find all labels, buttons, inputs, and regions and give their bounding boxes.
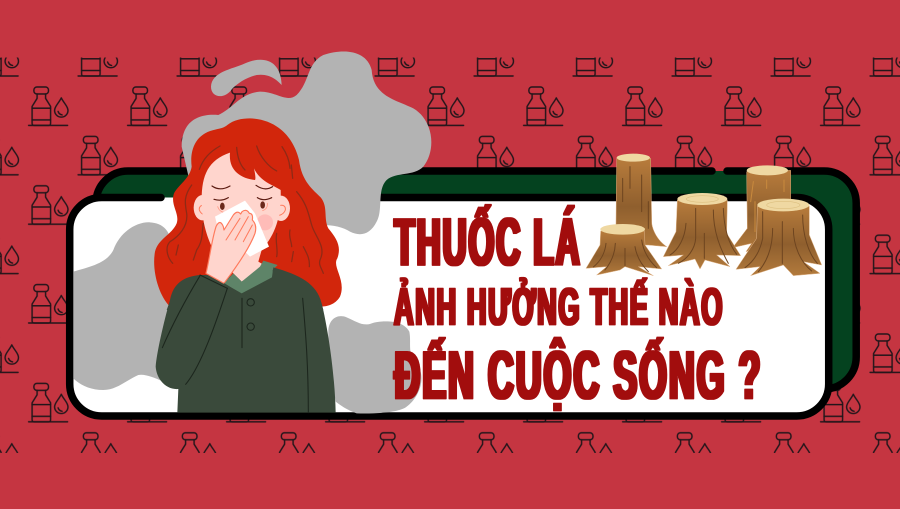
hair strands bbox=[167, 146, 323, 273]
eyes and eyebrows bbox=[212, 185, 273, 213]
illustration: woman covering her mouth with a tissue bbox=[154, 118, 342, 310]
ears bbox=[194, 195, 211, 220]
illustration: sweater body bbox=[156, 267, 336, 413]
collar bbox=[224, 261, 278, 293]
sweater shoulders bbox=[167, 263, 323, 310]
smoke: left cloud bbox=[73, 222, 173, 390]
stump back left bbox=[616, 154, 667, 247]
background pattern of bottles and drops bbox=[0, 58, 900, 453]
smoke: top cloud bbox=[182, 51, 431, 234]
hair bbox=[154, 118, 342, 307]
panel: dark green back frame bbox=[96, 171, 856, 389]
stump centre bbox=[663, 193, 741, 269]
cheek bbox=[257, 214, 273, 230]
face and neck bbox=[202, 153, 281, 282]
illustration: tree stumps bbox=[586, 154, 822, 276]
smoke: lower right cloud bbox=[328, 316, 421, 413]
stump back right bbox=[733, 165, 791, 252]
tissue bbox=[215, 201, 269, 257]
hand bbox=[206, 210, 256, 283]
stump front left bbox=[586, 224, 662, 276]
panel: white front frame bbox=[70, 198, 829, 416]
text: THUỐC LÁ bbox=[394, 204, 582, 280]
stump front right bbox=[736, 199, 822, 276]
